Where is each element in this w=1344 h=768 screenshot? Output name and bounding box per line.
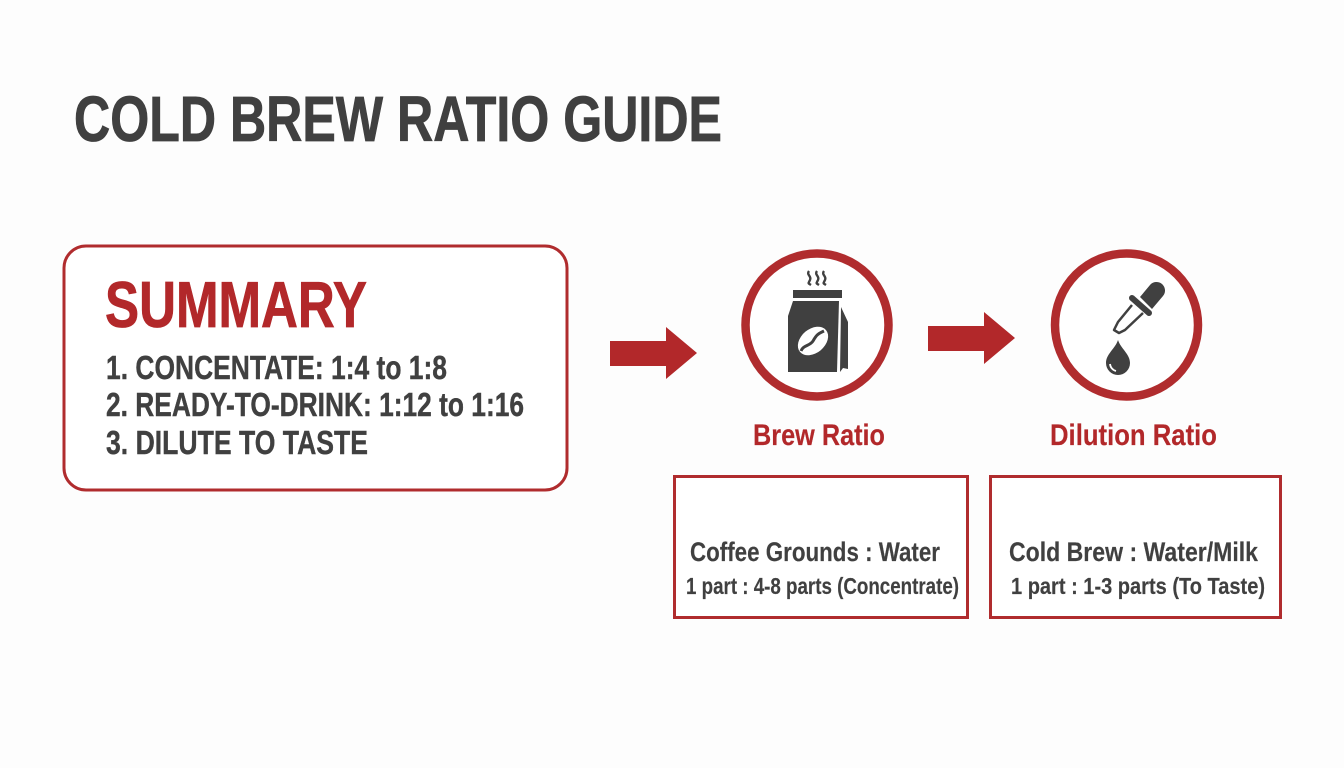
panel: brew ratio box <box>674 476 968 618</box>
summary border <box>64 246 567 490</box>
summary list: 2. READY-TO-DRINK: 1:12 to 1:16 <box>106 386 524 423</box>
summary list: 1. CONCENTATE: 1:4 to 1:8 <box>106 349 447 386</box>
title: COLD BREW RATIO GUIDE <box>74 83 722 155</box>
panel: brew ratio box: Coffee Grounds : Water <box>690 537 940 567</box>
panel: dilution ratio box: Cold Brew : Water/Milk <box>1009 537 1259 567</box>
panel: summary <box>64 246 567 490</box>
label: dilution ratio: Dilution Ratio <box>1050 419 1217 452</box>
summary heading: SUMMARY <box>105 268 367 341</box>
icon: coffee bag <box>746 254 888 396</box>
panel: brew ratio box: 1 part : 4-8 parts (Concentrate) <box>686 573 959 599</box>
label: brew ratio: Brew Ratio <box>753 419 885 452</box>
panel: dilution ratio box: 1 part : 1-3 parts (To Taste) <box>1011 573 1265 599</box>
arrow: brew ratio to dilution ratio <box>928 312 1015 364</box>
arrow: summary to brew ratio <box>610 327 697 379</box>
panel: dilution ratio box <box>990 476 1280 618</box>
summary list: 3. DILUTE TO TASTE <box>106 424 368 461</box>
icon: dropper <box>1055 254 1198 396</box>
summary list <box>106 349 524 461</box>
